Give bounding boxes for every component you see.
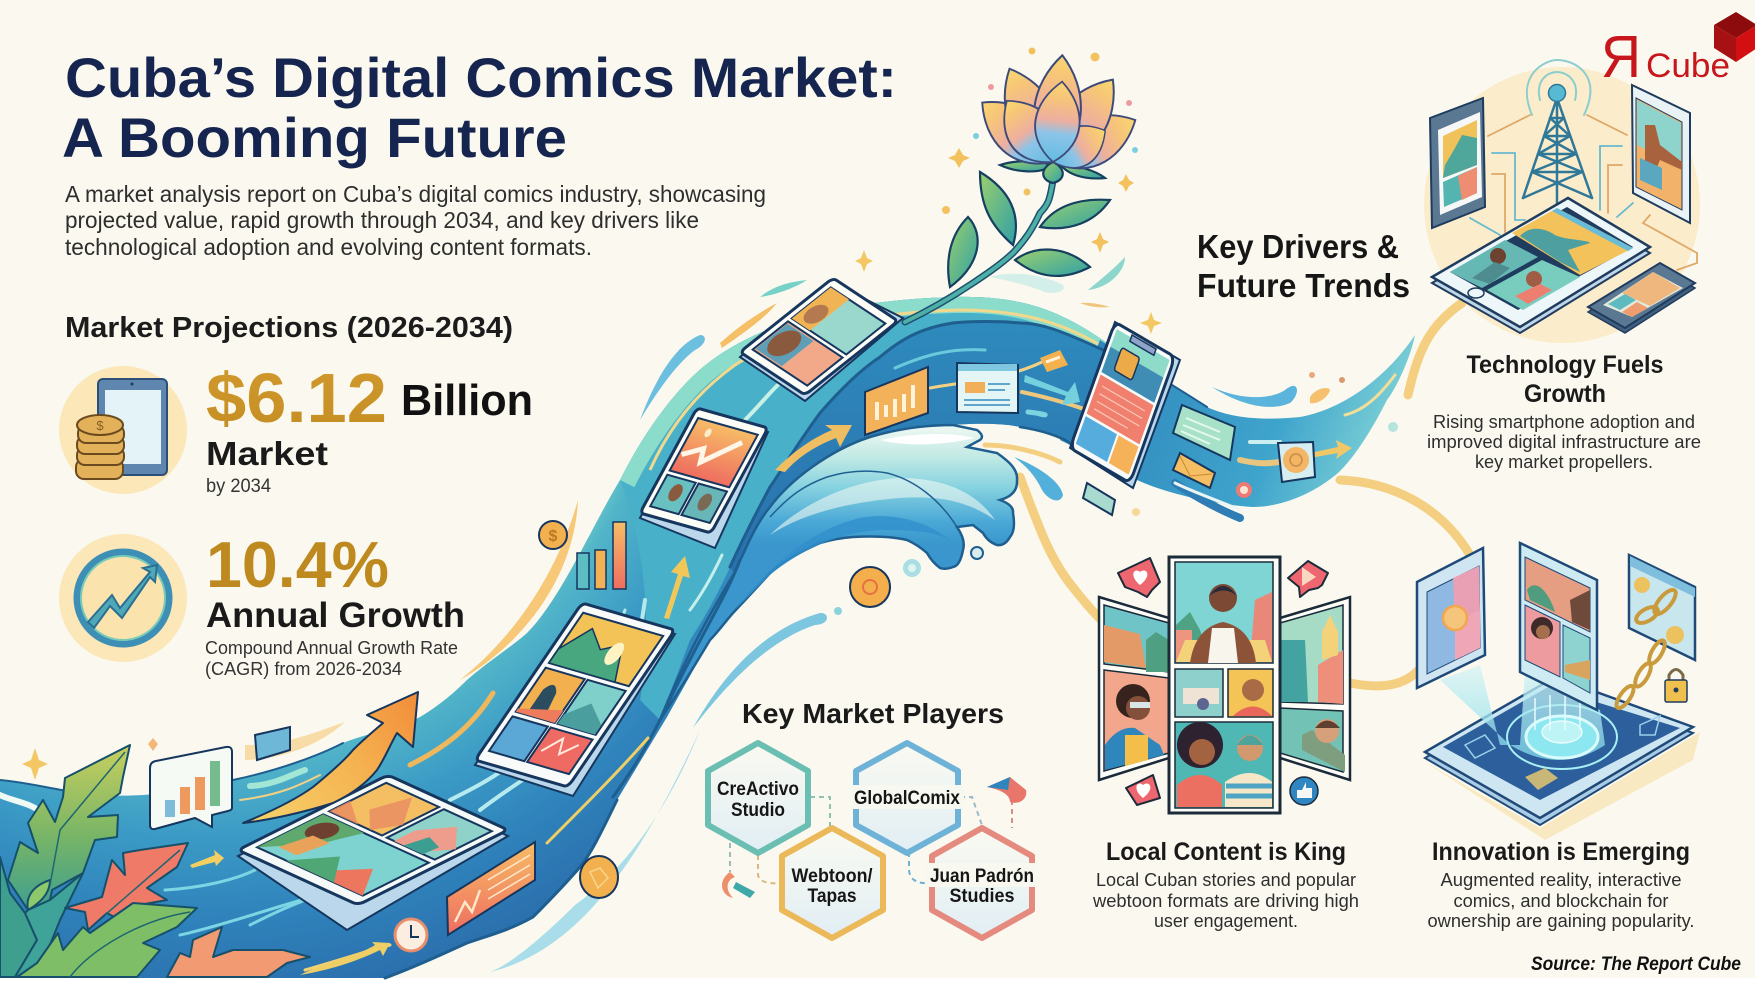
ribbon light streaks <box>0 350 1395 970</box>
heading: key drivers: Future Trends <box>1197 267 1410 304</box>
arrow markers on tail <box>1024 375 1352 459</box>
hex: GlobalComix: GlobalComix <box>854 788 960 809</box>
center holo panel <box>1520 543 1597 710</box>
phone left <box>1430 98 1485 228</box>
stat: market value: $6.12 <box>206 359 387 437</box>
hex: Juan Padron Studies: Studies <box>950 885 1015 907</box>
stat: annual growth <box>59 528 465 679</box>
center frame <box>1169 557 1280 813</box>
icon: orange envelope on ribbon <box>1040 350 1068 372</box>
stat: annual growth: (CAGR) from 2026-2034 <box>205 658 402 679</box>
text: technology fuels growth: Rising smartphone adoption and <box>1433 411 1695 432</box>
text: local content: webtoon formats are driving high <box>1092 890 1359 911</box>
right holo panel <box>1629 555 1695 660</box>
logo: RCube: Cube <box>1646 47 1730 85</box>
hex: CreActivo Studio <box>708 743 808 853</box>
text: local content: user engagement. <box>1154 910 1298 931</box>
coin: dollar: $ <box>549 528 558 545</box>
decorative wisps around the ribbon <box>245 257 1125 972</box>
intro text: technological adoption and evolving content formats. <box>65 234 592 260</box>
tablet <box>1432 198 1650 333</box>
stat: market value: by 2034 <box>206 476 271 497</box>
sparkles and small icons <box>22 250 1162 780</box>
hex: Webtoon Tapas <box>782 828 883 938</box>
tile: note card on tail <box>1173 405 1235 460</box>
text: technology fuels growth: key market propellers. <box>1475 451 1653 472</box>
intro text <box>65 181 766 260</box>
text: local content: Local Content is King <box>1106 838 1346 866</box>
hex: CreActivo Studio: CreActivo <box>717 778 799 800</box>
heading: key market players: Key Market Players <box>742 698 1004 729</box>
coin: dollar <box>539 521 567 549</box>
heading: key drivers <box>1197 228 1410 304</box>
icon: tablet and coins: $ <box>96 418 104 433</box>
left side panel <box>1099 597 1169 780</box>
illustration: technology network <box>1424 60 1700 343</box>
left holo panel <box>1417 548 1485 688</box>
text: technology fuels growth: Technology Fuels <box>1466 351 1664 379</box>
text: innovation: Augmented reality, interactive <box>1440 869 1682 890</box>
text: local content: Local Cuban stories and popular <box>1096 869 1356 890</box>
logo: RCube <box>1601 12 1755 90</box>
title: Cuba’s Digital Comics Market: <box>65 46 897 109</box>
coin: orange network coin <box>834 547 983 615</box>
stat: market value <box>59 359 533 497</box>
arrow: small yellow on ribbon <box>190 850 224 868</box>
icon: play bubble <box>1288 561 1328 597</box>
text: innovation: Innovation is Emerging <box>1432 838 1690 866</box>
intro text: A market analysis report on Cuba’s digital comics industry, showcasing <box>65 181 766 207</box>
main ribbon: flowing wave <box>0 297 1415 978</box>
icon: square badge on tail <box>1278 442 1315 482</box>
icon: heart badge on tail <box>1236 482 1252 498</box>
tile: falling card and droplet <box>1014 372 1398 516</box>
chain <box>1613 587 1679 711</box>
tile: bar chart on ribbon <box>865 367 928 435</box>
hex: Webtoon Tapas: Tapas <box>808 885 857 907</box>
icon: heart bubble top <box>1118 558 1160 597</box>
flower: lotus on a stem <box>905 48 1146 322</box>
dark blue arch band <box>730 322 1103 575</box>
bar icon <box>577 522 626 589</box>
arrow on ribbon band <box>775 425 852 472</box>
hologram beam <box>1440 665 1605 760</box>
connectors <box>730 797 1012 883</box>
hex: Juan Padron Studies: Juan Padrón <box>930 865 1034 887</box>
icon: growth arrow ring <box>59 534 187 662</box>
heading: market projections: Market Projections (2026-2034) <box>65 312 513 344</box>
device: large tablet with mountain comic <box>475 603 675 796</box>
chart bubble <box>150 747 232 829</box>
icon: tablet and coins <box>59 366 187 494</box>
text: technology fuels growth: improved digital infrastructure are <box>1427 431 1701 452</box>
illustration: innovation tablet hologram <box>1417 543 1700 840</box>
coin: gold <box>580 856 618 898</box>
ribbon outlines <box>0 322 1207 978</box>
arrow: yellow upward on ribbon <box>664 556 690 619</box>
text: technology fuels growth <box>1427 351 1701 472</box>
stat: annual growth: Annual Growth <box>206 596 465 635</box>
base tablet <box>1425 677 1700 840</box>
logo: RCube: Я <box>1601 24 1641 90</box>
hex: Juan Padron Studies <box>926 828 1038 938</box>
arrow: big growth arrow <box>243 692 418 823</box>
intro text: projected value, rapid growth through 2034, and key drivers like <box>65 207 699 233</box>
icon: small logo right <box>987 777 1026 803</box>
breaking wave foam <box>660 425 1017 720</box>
icon: thumb up <box>1290 777 1318 805</box>
arrow: yellow lower <box>300 942 390 975</box>
small phone <box>1588 263 1695 333</box>
upper teal band <box>620 297 1107 720</box>
connector: golden paths between drivers <box>985 303 1470 686</box>
hex: Webtoon Tapas: Webtoon/ <box>792 865 873 887</box>
device: flat tablet on ribbon <box>238 775 508 930</box>
illustration: local content comic panels <box>1099 557 1350 813</box>
leaves: foreground foliage <box>0 745 310 977</box>
hex: GlobalComix <box>850 743 964 853</box>
title <box>62 46 897 169</box>
tile: browser window on ribbon <box>957 363 1018 413</box>
panel: key market players hexagons <box>708 743 1038 938</box>
icon: padlock <box>1665 670 1687 702</box>
text: innovation: ownership are gaining popularity. <box>1428 910 1694 931</box>
small tile near arrow <box>255 727 290 760</box>
text: local content <box>1092 838 1359 931</box>
stat: market value: Billion <box>401 376 533 425</box>
device: big phone on ribbon <box>1070 322 1180 488</box>
title: A Booming Future <box>62 106 567 169</box>
stat: annual growth: 10.4% <box>206 528 389 601</box>
hex: CreActivo Studio: Studio <box>731 799 785 821</box>
stat: market value: Market <box>206 435 328 472</box>
text: innovation: comics, and blockchain for <box>1454 890 1668 911</box>
heading: key drivers: Key Drivers & <box>1197 228 1399 265</box>
icon: small logo left <box>722 872 755 898</box>
stat: annual growth: Compound Annual Growth Rate <box>205 637 458 658</box>
text: technology fuels growth: Growth <box>1524 380 1606 408</box>
device: tablet top on ribbon <box>740 278 903 401</box>
tile: orange chart at bottom <box>447 842 535 935</box>
icon: envelope on tail <box>1173 453 1215 488</box>
device: tablet with rising chart <box>640 408 768 548</box>
icon: clock <box>395 919 427 951</box>
phone right <box>1632 85 1690 223</box>
icon: heart bubble low <box>1126 775 1160 805</box>
text: innovation <box>1428 838 1694 931</box>
tower and wires <box>1470 60 1697 270</box>
right side panel <box>1280 597 1350 780</box>
right tail of ribbon <box>1060 335 1415 507</box>
source note: Source: The Report Cube <box>1531 954 1741 975</box>
